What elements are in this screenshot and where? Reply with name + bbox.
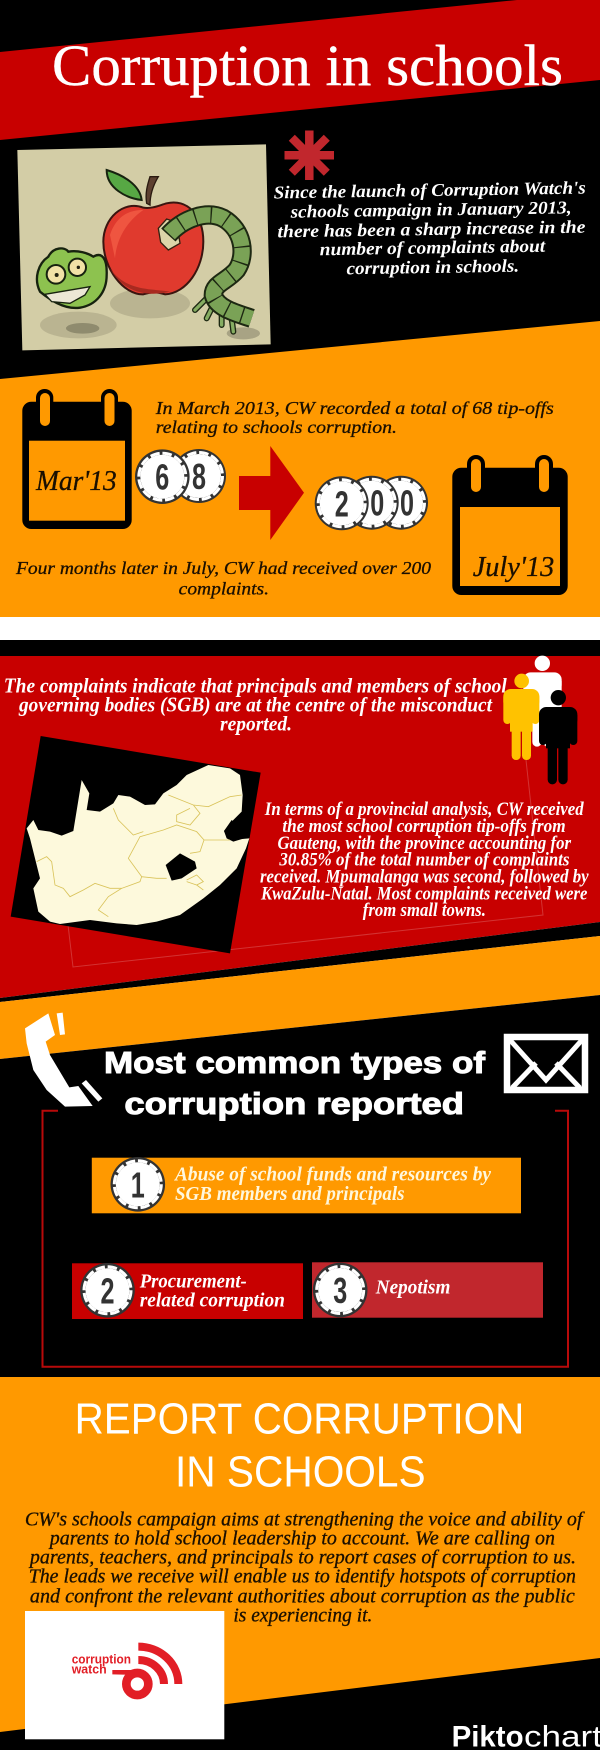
list item 2: Procurement- (139, 1270, 247, 1292)
list item 1: SGB members and principals (175, 1183, 405, 1205)
heading: report corruption: IN SCHOOLS (175, 1448, 426, 1497)
text block: July complaints: Four months later in July, CW had received over 200 (15, 558, 431, 578)
text block: principals and SGB (4, 674, 507, 736)
text block: intro: Since the launch of Corruption Watch's (274, 178, 586, 202)
text block: campaign: parents, teachers, and principals to report cases of corruption to us. (28, 1547, 576, 1569)
panel: corruption types background (0, 995, 600, 1377)
text block: intro (274, 178, 587, 279)
list item 1 (92, 1157, 521, 1213)
icon: March calendar: Mar'13 (35, 465, 117, 497)
icon: phone (25, 1013, 102, 1107)
text block: July complaints: complaints. (179, 578, 269, 598)
illustration: apple with worm (17, 144, 271, 350)
list item 3: Nepotism (375, 1276, 450, 1298)
logo: corruption watch (25, 1611, 224, 1739)
number chips: 200: 2 (335, 483, 349, 524)
number chips: 68: 6 (155, 457, 169, 498)
number chips: 200: 0 (400, 483, 414, 524)
text block: intro: there has been a sharp increase in the (277, 217, 586, 241)
list item 2 (72, 1263, 303, 1319)
text block: campaign: parents to hold school leadership to account. We are calling on (48, 1528, 555, 1550)
icon: July calendar (452, 455, 568, 595)
text block: March tip-offs: In March 2013, CW recorded a total of 68 tip-offs (155, 398, 554, 418)
text block: provincial analysis (260, 799, 589, 921)
text block: campaign: and confront the relevant authorities about corruption as the public (30, 1585, 575, 1607)
logo: corruption watch: watch (71, 1661, 107, 1676)
icon: red asterisk (284, 130, 334, 180)
text block: March tip-offs: relating to schools corruption. (156, 417, 397, 437)
heading: most common types: Most common types of (104, 1045, 486, 1080)
heading: most common types: corruption reported (124, 1086, 464, 1121)
red frame (42, 1111, 568, 1367)
list item 3 (312, 1262, 543, 1318)
footer: Piktochart brand (452, 1721, 600, 1750)
text block: principals and SGB: The complaints indicate that principals and members of school (4, 674, 507, 698)
text block: provincial analysis: from small towns. (363, 900, 486, 921)
panel: intro background (0, 0, 600, 400)
number chips: 68 (135, 449, 226, 504)
heading: report corruption: REPORT CORRUPTION (75, 1394, 524, 1443)
text block: March tip-offs (155, 398, 554, 437)
panel: report background (0, 1377, 600, 1750)
text block: provincial analysis: the most school corruption tip-offs from (282, 816, 566, 837)
text block: campaign: is experiencing it. (233, 1605, 372, 1627)
number chips: 200 (315, 476, 428, 530)
panel: orange timeline (0, 321, 600, 617)
arrow (239, 446, 304, 540)
text block: principals and SGB: reported. (220, 712, 292, 736)
white gap (0, 617, 600, 640)
logo: corruption watch: corruption (72, 1651, 131, 1666)
list item 2: 2 (100, 1270, 114, 1311)
icon: three people (503, 656, 577, 784)
faint frame (68, 760, 543, 967)
list item 1: Abuse of school funds and resources by (173, 1164, 491, 1186)
list item 3: 3 (333, 1270, 347, 1311)
list item 2: related corruption (140, 1290, 285, 1312)
text block: July complaints (15, 558, 431, 598)
panel: complaints background (0, 640, 600, 1002)
icon: envelope (507, 1037, 585, 1090)
heading: most common types (104, 1045, 486, 1121)
icon: March calendar (22, 389, 132, 529)
map: South Africa (11, 736, 261, 953)
icon: July calendar: July'13 (473, 551, 554, 583)
list item 1: 1 (131, 1164, 145, 1205)
text block: campaign: CW's schools campaign aims at strengthening the voice and ability of (25, 1509, 585, 1531)
number chips: 200: 0 (370, 483, 384, 524)
text block: campaign: The leads we receive will enable us to identify hotspots of corruption (29, 1566, 576, 1588)
panel: orange band (0, 936, 600, 1059)
text block: intro: schools campaign in January 2013, (289, 197, 572, 222)
text block: intro: number of complaints about (320, 236, 546, 259)
text block: campaign (25, 1509, 585, 1627)
heading: report corruption (75, 1394, 524, 1497)
text block: provincial analysis: 30.85% of the total number of complaints (279, 850, 570, 870)
text block: intro: corruption in schools. (346, 256, 519, 278)
number chips: 68: 8 (192, 456, 206, 497)
text block: principals and SGB: governing bodies (SGB) are at the centre of the misconduct (18, 693, 493, 717)
title: Corruption in schools (52, 33, 563, 98)
